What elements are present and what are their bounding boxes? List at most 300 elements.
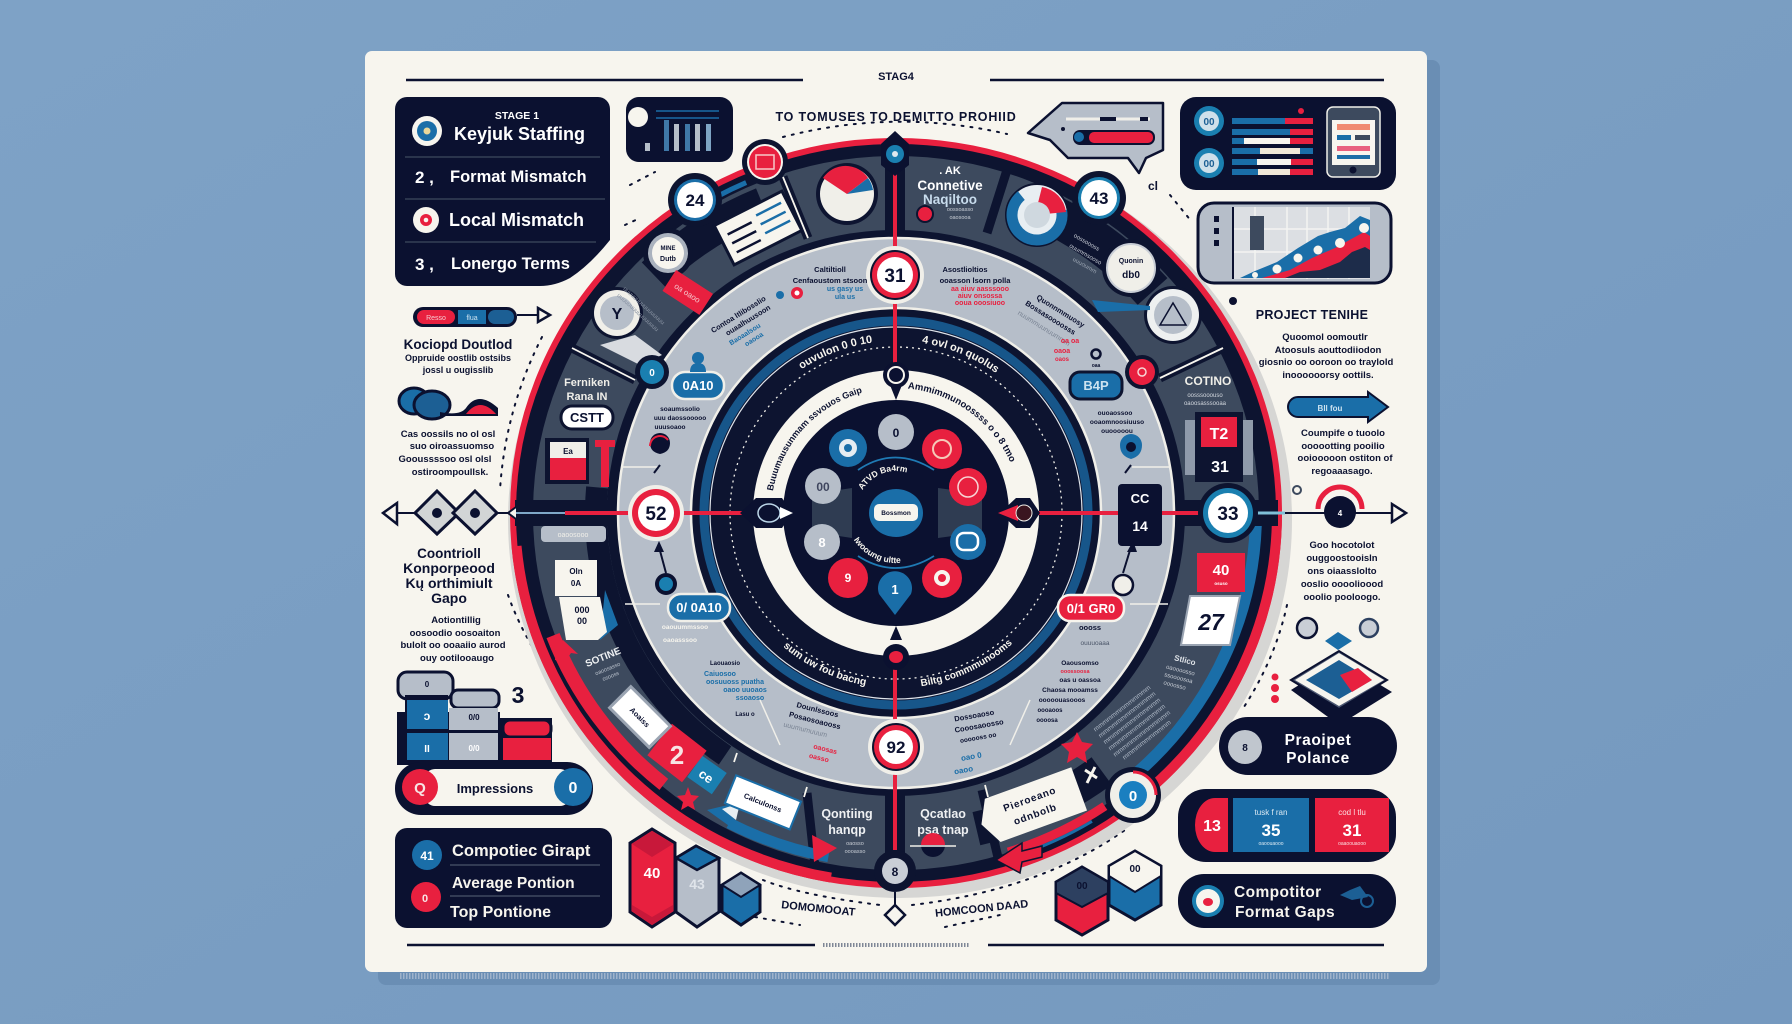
text block: right 1: inoooooorsy oottils.	[1282, 370, 1374, 381]
slate label lower left: oaoosasso	[595, 662, 621, 677]
text block: right 3: ooolio pooloogo.	[1303, 592, 1381, 603]
red micro text right: oaos	[1055, 357, 1070, 363]
arrow node right lower	[1113, 541, 1137, 595]
white stacked cards left: Oln	[569, 567, 583, 576]
top pin	[881, 131, 909, 176]
grey ring caption lower right: oooosa	[1036, 718, 1058, 724]
icon: impressions red	[402, 769, 438, 805]
text block: left 2: Cas oossils no ol osl	[401, 429, 495, 440]
red dot label: oaosooa	[949, 215, 971, 221]
pill red lower right: 0/1 GR0	[1067, 601, 1115, 616]
slate text right: oaoosasssooaa	[1184, 401, 1227, 407]
legend row 2: Average Pontion	[452, 875, 575, 892]
white cross lower right	[1085, 767, 1097, 783]
horizontal axis right far segment	[1250, 512, 1285, 514]
petal gray lower	[804, 524, 840, 560]
gaps label	[1234, 884, 1335, 921]
grey ring text rotated left: ouaalhuusoon	[724, 303, 772, 338]
slate text bottom left: oaosso	[846, 841, 864, 847]
grey ring text upper right: ooasson lsorn polla	[940, 276, 1011, 285]
grey ring caption right: ooaomnoosiuuso	[1090, 419, 1144, 426]
tile 13: 13	[1203, 818, 1221, 835]
impressions label: Impressions	[457, 781, 533, 796]
slate text lower right	[1161, 652, 1199, 693]
row 1 text: Keyjuk Staffing	[454, 124, 585, 144]
panel: stage list	[395, 97, 610, 286]
box blue	[722, 873, 760, 925]
text block: left 2	[399, 429, 495, 478]
slate heading top: . AK	[939, 165, 961, 177]
petal gray lower: 8	[818, 535, 826, 550]
grey ring caption lower right: oas u oassoa	[1059, 677, 1101, 684]
icon: half gauge	[1318, 487, 1362, 528]
stage label: STAG4	[878, 71, 915, 83]
legend row 1: Compotiec Girapt	[452, 842, 591, 860]
red arrow lower left	[555, 640, 578, 662]
panel: bars and phone	[1180, 97, 1396, 190]
pill CSTT: CSTT	[570, 410, 604, 425]
text block: right 3: ooslio oooolioood	[1301, 579, 1383, 590]
tile 35	[1233, 798, 1309, 852]
panel shadow	[378, 60, 1440, 985]
chart: stacked columns: 0/0	[468, 713, 480, 722]
slate text right	[1184, 374, 1231, 407]
grey ring caption lower centre left: oasso	[808, 753, 829, 764]
badge 31	[866, 246, 924, 304]
lower right arrow	[996, 843, 1042, 873]
icon: 41: 41	[420, 849, 434, 863]
badge blue lower right	[1105, 767, 1161, 823]
blue node left	[635, 355, 669, 389]
horizontal axis right red	[1036, 511, 1215, 515]
hub curved caption bottom: Iwooung ultte	[854, 536, 900, 564]
text block: left 1	[404, 337, 512, 375]
text block: right 2: ooiooooon ostiton of	[1298, 453, 1393, 464]
slate text bottom right: Qcatlao	[920, 807, 966, 821]
slate label lower left: osooss	[602, 671, 620, 683]
blue node left: 0	[649, 368, 655, 379]
pin icon left	[650, 433, 670, 473]
icon: stage 1	[412, 116, 442, 146]
badge 24	[668, 173, 722, 227]
grey ring text upper right: ooua ooosiuoo	[955, 300, 1005, 307]
badge tool left: Y	[612, 306, 623, 323]
text block: right 2: oooootting pooilio	[1301, 441, 1385, 452]
panel: numeric tiles	[1178, 789, 1396, 862]
text block: right 3: ouggoostooisln	[1306, 553, 1378, 564]
badge 92: 92	[887, 738, 905, 757]
badge red top left	[742, 139, 788, 185]
text block: left 3: ouy ootilooaugo	[420, 653, 494, 664]
row 2 number: 2 ,	[415, 168, 434, 187]
pin icon right	[1120, 434, 1142, 473]
petal gray upper	[805, 468, 841, 504]
petal red 4: 9	[845, 571, 852, 585]
text block: left 3	[400, 615, 506, 664]
icon: impressions blue	[554, 768, 592, 806]
bottom rule right	[988, 944, 1384, 946]
text block: right 2: Coumpife o tuoolo	[1301, 428, 1385, 439]
panel: competitor gaps	[1178, 874, 1396, 928]
white stacked cards left: 0A	[571, 579, 581, 588]
top left blue arc	[524, 152, 1268, 874]
slate text bottom left	[821, 807, 873, 855]
hub centre label: Bossmon	[881, 510, 911, 517]
row 2 text: Format Mismatch	[450, 168, 587, 186]
red micro text right: oaoa	[1054, 348, 1070, 355]
grey ring text upper right: Asostlioltios	[942, 265, 988, 274]
slate text lower right: oooosso	[1163, 680, 1187, 692]
red tag upper left: oa oaoo	[673, 282, 702, 305]
slate text left	[564, 377, 610, 403]
polance label	[1285, 732, 1351, 767]
panel: impressions	[395, 762, 593, 815]
hatched label upper left: uuuuuuuuuuuuuuuu	[621, 286, 665, 326]
grey ring caption lower left: oaoasssoo	[663, 637, 697, 644]
side stripes right	[1185, 420, 1253, 475]
icons: blue circles: 00	[1203, 117, 1215, 128]
badge small cream left: Dutb	[660, 256, 676, 263]
slate heading top: Connetive	[917, 178, 983, 193]
badge cream right: db0	[1122, 270, 1140, 281]
grey ring text rotated right: nuummuunuummm	[1016, 310, 1071, 348]
text block: right 2	[1298, 428, 1393, 477]
blue connector right	[1092, 300, 1150, 312]
box 43: 43	[689, 876, 705, 892]
chart: area card	[1198, 203, 1391, 283]
speech bubble	[1028, 103, 1163, 173]
dark carrier arcs	[551, 178, 1241, 848]
red box 2: 2	[670, 740, 684, 770]
red box T2: 31	[1211, 459, 1229, 476]
legend pill with arrow	[413, 307, 550, 327]
white card lower right: Pieroeano	[1002, 785, 1058, 815]
slate text left: Rana IN	[567, 391, 608, 403]
red box 40: 40	[1213, 562, 1229, 579]
grid text lower right: mmmmmmmmmmmmm	[1092, 684, 1152, 733]
gaps label: Format Gaps	[1235, 904, 1335, 921]
star lower left	[677, 787, 699, 810]
red box 2	[647, 724, 707, 782]
white card lower right	[974, 767, 1087, 846]
grey ring caption lower centre right: oao 0	[960, 750, 983, 763]
blue icon lower left: ce	[696, 766, 716, 787]
icon: grey disc	[1228, 730, 1262, 764]
icon: blue shapes	[1340, 886, 1373, 907]
hub connector arcs	[858, 458, 934, 568]
grey ring text upper right: aa aiuv aasssooo	[951, 286, 1009, 293]
slate heading top	[917, 165, 983, 207]
white arrow highlight	[722, 803, 740, 820]
icon: impressions red: Q	[414, 780, 426, 797]
grey ring caption lower right: oooss	[1079, 623, 1101, 632]
hatched bottom edge	[400, 973, 1390, 979]
main circular diagram	[508, 131, 1292, 927]
blue arrow lower left	[707, 802, 740, 828]
text block: right 3: Goo hocotolot	[1310, 540, 1375, 551]
chart: 3D boxes left	[630, 829, 760, 927]
red dot label: oossoasso	[947, 207, 973, 213]
gaps label: Compotitor	[1234, 884, 1322, 901]
tile 31	[1315, 798, 1389, 852]
icon: impressions blue: 0	[569, 780, 578, 797]
white card lower right: odnbolb	[1012, 802, 1058, 828]
legend pill with arrow: Resso	[426, 315, 446, 322]
panel: mini bar chart	[626, 97, 733, 162]
panel: competitor legend	[395, 828, 612, 928]
curved text on dark ring bottom right: Biltg commmunooms	[920, 640, 1012, 686]
grey ring caption lower left	[662, 624, 708, 644]
slate text right: oosssooouso	[1187, 393, 1223, 399]
text block: left 3: bulolt oo ooaaiio aurod	[400, 640, 506, 651]
grey ring caption lower centre left	[777, 698, 847, 766]
grey ring text rotated left: Contoa ltlibosslio	[709, 294, 768, 335]
grey ring caption lower centre right: oooooss oo	[959, 732, 997, 745]
outer red rim	[513, 141, 1279, 885]
hub centre oval	[869, 489, 923, 537]
grey ring caption lower right: ouuuoaaa	[1081, 640, 1110, 647]
grey ring caption left: uuusoaoo	[654, 424, 686, 431]
arrow: blue	[1288, 392, 1388, 422]
tile 31: 31	[1343, 821, 1361, 840]
icon: tablet diamond	[1291, 651, 1392, 725]
thick red rim lower left	[515, 143, 1277, 883]
small text right of gauge: oossoooss	[1072, 233, 1100, 253]
grey ring caption lower left blue: Caiuosoo	[704, 671, 736, 678]
row dividers	[405, 157, 605, 242]
grey ring caption lower centre left: oaosas	[813, 744, 838, 756]
grey ring caption lower left blue: ssoaoso	[736, 695, 764, 702]
lower left blue arc	[536, 163, 1256, 863]
cream ring notches	[890, 385, 902, 640]
petal red 4	[828, 558, 868, 598]
heading: control gaps	[403, 546, 495, 606]
grey ring caption lower right: Chaosa mooamss	[1042, 687, 1098, 694]
white card lower left	[725, 775, 801, 829]
pill blue lower left: 0/ 0A10	[676, 600, 722, 615]
grey ring caption right: ouooooou	[1101, 428, 1133, 435]
pill blue left: 0A10	[682, 378, 714, 393]
red document icon: Ea	[563, 447, 573, 456]
icon: clouds	[399, 388, 498, 419]
small text right of gauge	[1062, 233, 1108, 276]
badge 92	[868, 719, 924, 775]
grey ring caption lower centre left: Dounlssoos	[796, 700, 839, 719]
grey ring caption lower centre right: oaoo	[953, 764, 974, 776]
box white blue: 00	[1129, 864, 1141, 875]
donut gauge right top	[1006, 184, 1068, 246]
icon: 41	[412, 840, 442, 870]
cream ring	[753, 370, 1039, 656]
right blue arc	[536, 163, 1256, 863]
text block: right 1	[1259, 332, 1393, 381]
petal gray top	[878, 414, 914, 450]
grey ring caption lower left blue: Lasu o	[735, 712, 755, 718]
box 14 on axis	[1118, 484, 1162, 546]
icon: half gauge: 4	[1338, 509, 1343, 518]
grey ring caption lower centre left: Posaosoaooss	[788, 710, 842, 731]
petal red 1	[922, 429, 962, 469]
grey ring caption lower left blue	[704, 661, 767, 718]
chart: stacked columns: ɔ	[424, 709, 431, 723]
grey ring caption right: ouoaossoo	[1098, 410, 1132, 417]
white card mid lower left: Aoaiss	[628, 705, 652, 729]
petal gray upper: 00	[816, 480, 830, 494]
grey ring text upper left: Cenfaoustom stsoon	[793, 276, 868, 285]
text block: left 3: Aotiontillig	[431, 615, 481, 626]
grey ring text rotated right	[1016, 289, 1087, 349]
box 40: 40	[644, 865, 660, 882]
white box 27	[1181, 596, 1240, 645]
horizontal axis left red	[680, 511, 755, 515]
half sphere icon bottom	[910, 833, 956, 857]
number 3: 3	[512, 682, 524, 708]
box dark red: 00	[1076, 881, 1088, 892]
left axis head	[740, 498, 793, 528]
icon: red 0	[411, 882, 441, 912]
grey ring caption lower left blue: oaoo uuoaos	[723, 687, 767, 694]
bottom caption right: HOMCOON DAAD	[935, 898, 1029, 920]
folded paper icon	[600, 335, 662, 365]
red triangle bottom	[812, 835, 837, 862]
petal red 3	[922, 558, 962, 598]
dark inner ring	[691, 308, 1101, 718]
red dots	[1271, 674, 1279, 703]
top ring node	[883, 362, 909, 388]
curved text on dark ring top: ouvulon 0 0 10	[800, 335, 872, 368]
chart: 3D boxes right	[1056, 851, 1161, 935]
badge 43: 43	[1090, 189, 1108, 208]
badge 31: 31	[884, 266, 906, 287]
text block: right 3: ons oiaasslolto	[1307, 566, 1377, 577]
heading: project timeline: PROJECT TENIHE	[1256, 308, 1368, 322]
slate text bottom right: psa tnap	[917, 823, 969, 837]
blue icon lower left	[687, 756, 727, 794]
text block: right 1: Quoomol oomoutlr	[1282, 332, 1368, 343]
slate text lower right: Stlico	[1173, 653, 1197, 667]
text block: left 2: Gooussssoo osl olsl	[399, 454, 491, 465]
grey ring caption lower right: Oaousomso	[1061, 660, 1099, 667]
stage 1 label: STAGE 1	[495, 110, 539, 122]
text block: right 1: Atoosuls aouttodiiodon	[1275, 345, 1381, 356]
small text right of gauge: uuuoumm	[1071, 257, 1097, 275]
badge 43	[1072, 171, 1126, 225]
slate text bottom right	[917, 807, 969, 837]
thick red rim lower right	[515, 143, 1277, 883]
chart: stacked columns: II	[424, 744, 430, 755]
text block: left 3: oosoodio oosoaiton	[410, 628, 501, 639]
tile 31: oaaoouaooo	[1338, 841, 1366, 847]
slate text bottom left: oooasso	[845, 849, 865, 855]
grey ring caption lower right: ooossoosa	[1060, 669, 1090, 675]
small ring icon right: oaa	[1092, 363, 1101, 369]
tile 35: 35	[1262, 821, 1280, 840]
grey ring caption lower right: ooooouasooos	[1039, 697, 1086, 704]
vertical axis bottom red	[893, 668, 897, 850]
heading: control gaps: Kų orthimiult	[405, 575, 493, 591]
bottom caption left: DOMOMOOAT	[781, 899, 856, 919]
grey ring text upper left: Caltiltioll	[814, 265, 846, 274]
white card mid lower left	[610, 687, 670, 747]
grey ring caption lower centre right	[944, 706, 1012, 776]
grey ring text upper left: us gasy us	[827, 286, 863, 293]
icon: diamonds	[415, 491, 497, 534]
grey ring text rotated left: Baoaalsou	[728, 323, 762, 347]
outer soft shadow	[508, 142, 1292, 898]
polance label: Praoipet	[1285, 732, 1351, 749]
red box 40	[1197, 553, 1245, 592]
white stacked cards left: 000	[574, 605, 590, 615]
row 4 text: Lonergo Terms	[451, 255, 570, 273]
star lower right	[1061, 732, 1093, 763]
horizontal axis left far segment	[514, 512, 565, 514]
pie chart left top	[816, 163, 878, 225]
grey ring text rotated right: Quonnmmuosy	[1035, 293, 1087, 330]
white stacked cards left: 00	[577, 616, 587, 626]
dashed ring	[730, 347, 1062, 679]
slate label lower left	[584, 646, 630, 687]
polance label: Polance	[1286, 750, 1350, 767]
pill blue left	[672, 372, 724, 399]
segment dividers	[515, 145, 1278, 880]
slate text lower right: ssoooosoa	[1163, 672, 1194, 685]
arrow: blue: Bll fou	[1318, 404, 1343, 413]
badge cream right	[1102, 239, 1160, 297]
badge small cream left: MINE	[660, 246, 676, 252]
bottom rule left	[407, 944, 815, 946]
text block: right 3	[1301, 540, 1383, 603]
grey ring caption lower centre left: uuumumuuum	[783, 722, 828, 739]
slate text lower right: oaoooosso	[1165, 665, 1196, 678]
pill CSTT	[561, 406, 613, 429]
outer dark ring	[514, 142, 1278, 884]
bottom pin	[874, 850, 916, 892]
stem to diamond	[885, 892, 905, 925]
row 3 text: Local Mismatch	[449, 210, 584, 230]
blue band	[704, 321, 1088, 705]
curved text on dark ring bottom left: sum uw fou bacng	[784, 643, 866, 687]
person icon left	[690, 352, 706, 372]
tile 31: cod l tlu	[1338, 808, 1366, 817]
grey ring caption lower left: oaouummssoo	[662, 624, 708, 631]
curved text on dark ring top right: 4 ovl on quolus	[922, 336, 998, 372]
top rule right	[990, 79, 1384, 81]
icon: grey disc: 8	[1242, 743, 1248, 754]
slate text bottom left: Qontiing	[821, 807, 873, 821]
white card lower left: Calculonss	[743, 791, 783, 815]
curved top heading: TO TOMUSES TO DEMITTO PROHIID	[775, 110, 1017, 124]
card white top left	[714, 191, 802, 265]
red micro text right	[1054, 338, 1079, 363]
grey ring caption left: uuu daossooooo	[654, 415, 706, 422]
slate heading top: Naqiltoo	[923, 192, 977, 207]
small glyph: cl	[1148, 179, 1158, 193]
icon: target	[1192, 885, 1224, 917]
text block: left 1: Kociopd Doutlod	[404, 337, 512, 352]
badge 24: 24	[686, 191, 705, 210]
dot marker	[1229, 297, 1237, 305]
grey text ring	[618, 238, 1174, 788]
icons: blue circles: 00	[1203, 159, 1215, 170]
text block: left 2: suo oiroassuomso	[410, 441, 494, 452]
badge cream right: Quonin	[1119, 258, 1143, 265]
white box 27: 27	[1197, 609, 1225, 635]
red box T2: T2	[1210, 426, 1228, 443]
arrow node left lower	[654, 541, 677, 595]
panel: project polance	[1219, 717, 1397, 775]
text block: left 2: ostiroompoullsk.	[412, 467, 488, 478]
dotted guide arcs	[500, 122, 1287, 927]
